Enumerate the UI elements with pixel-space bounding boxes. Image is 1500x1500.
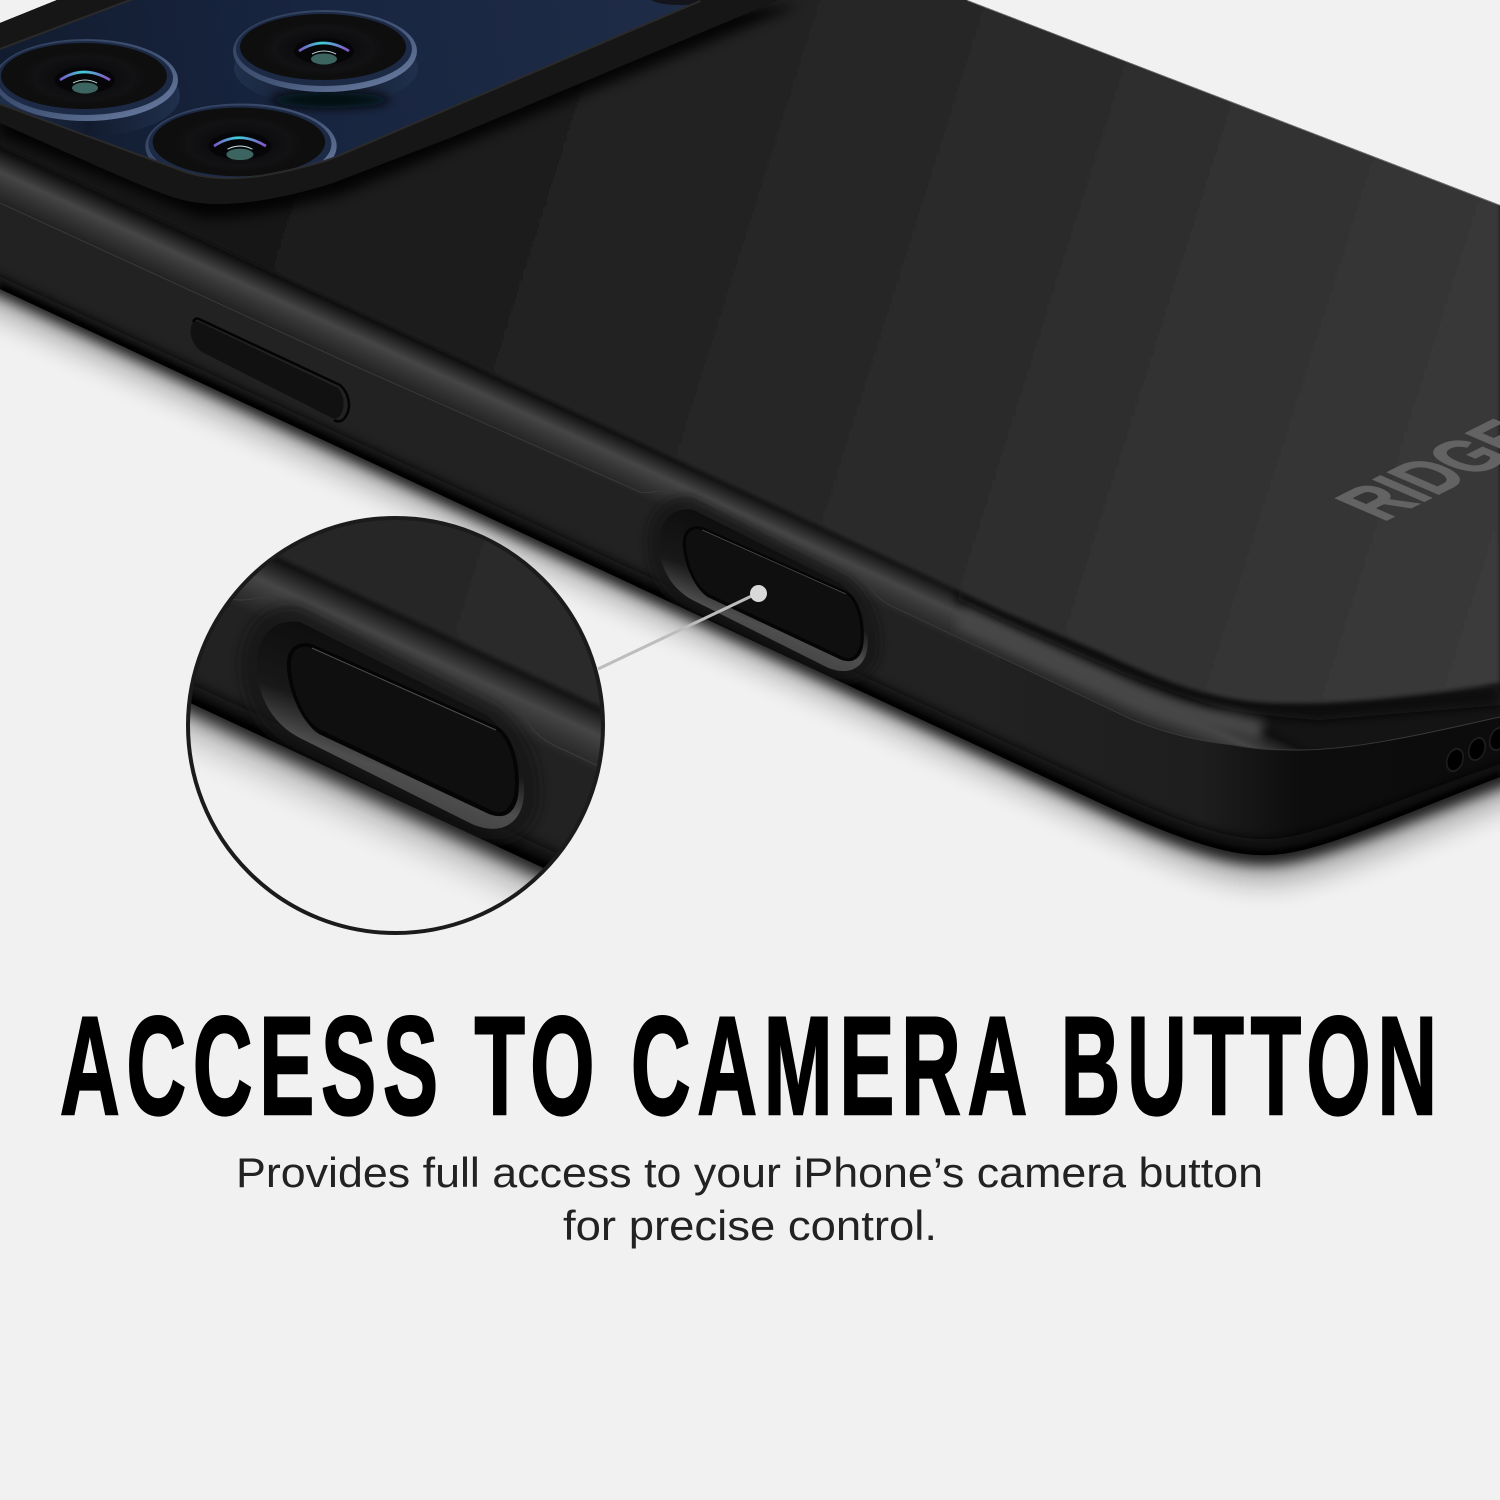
callout pointer line and dot — [598, 585, 767, 669]
blue phone glass — [0, 0, 700, 177]
side button on case — [191, 318, 349, 421]
bump shadow — [0, 5, 800, 217]
bump frame — [0, 0, 779, 204]
subtitle text — [236, 1149, 1263, 1249]
speaker holes — [1443, 724, 1500, 775]
subtitle text: for precise control. — [563, 1202, 937, 1249]
camera bump — [0, 0, 800, 217]
magnifier callout — [186, 516, 605, 935]
title: ACCESS TO CAMERA BUTTON — [60, 989, 1437, 1144]
phone case back — [0, 0, 1500, 900]
camera lenses — [0, 0, 710, 189]
subtitle text: Provides full access to your iPhone’s camera button — [236, 1149, 1263, 1196]
